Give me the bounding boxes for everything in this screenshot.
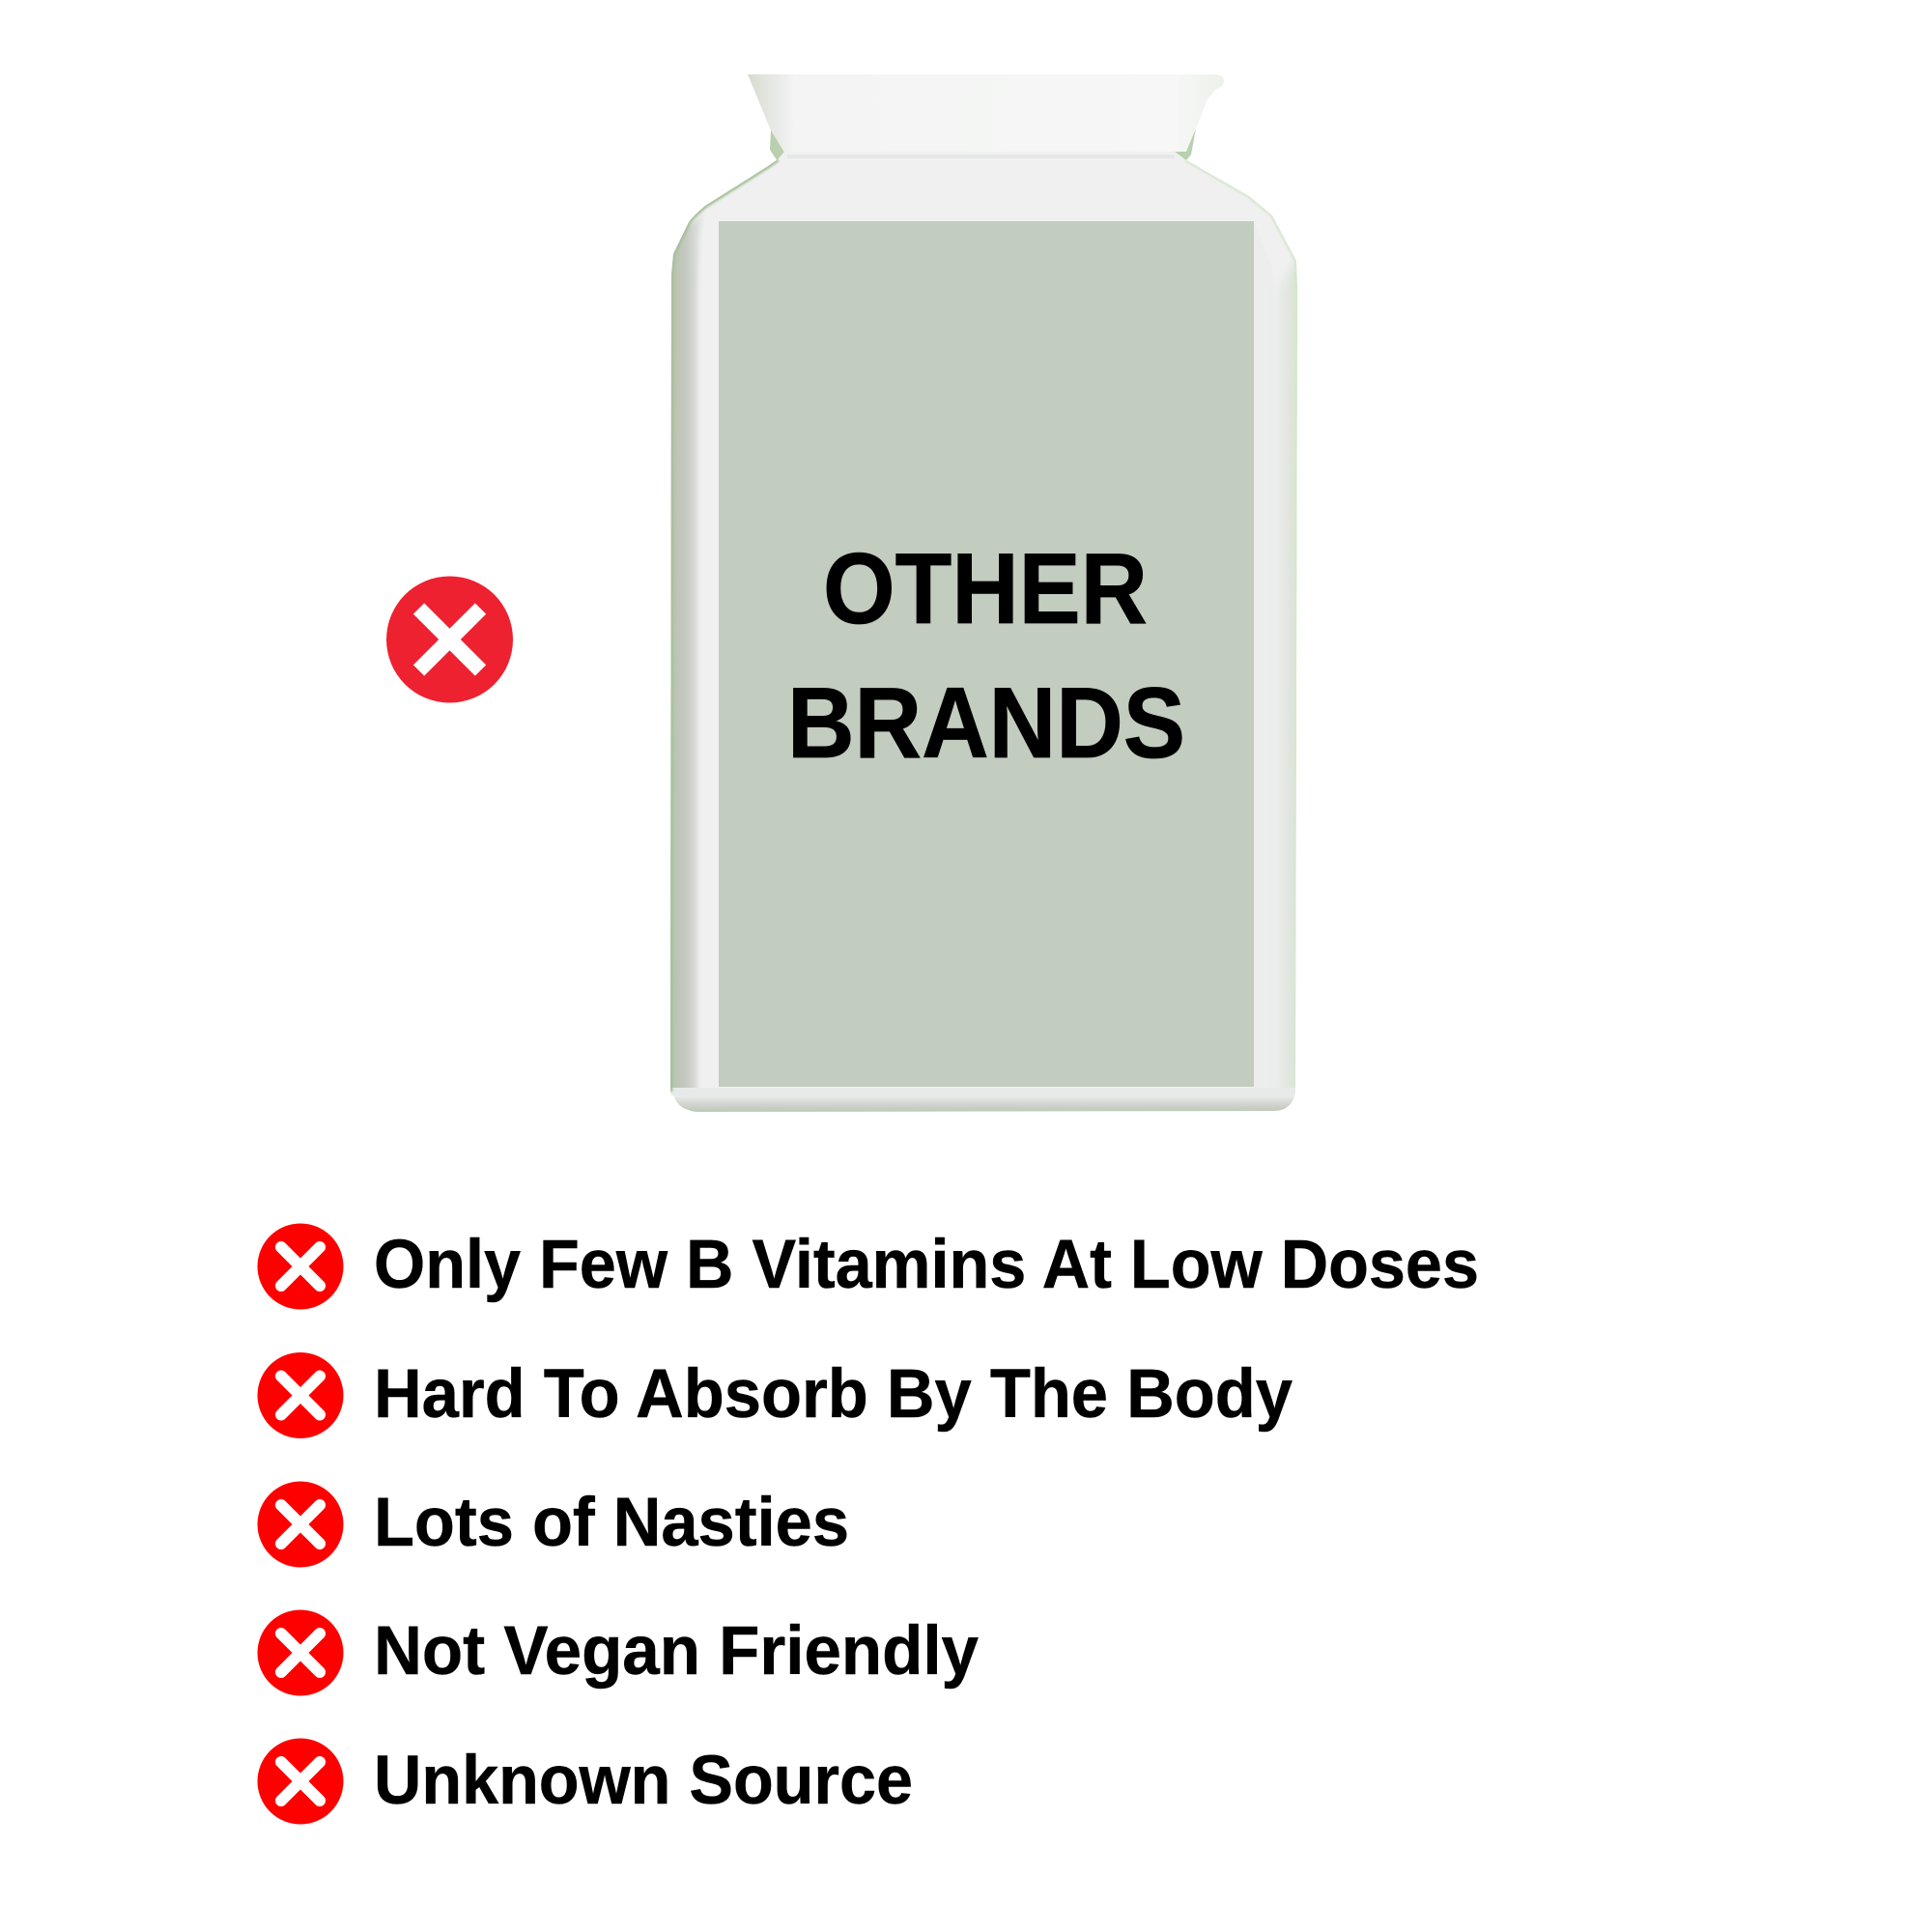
bottle lid bbox=[748, 74, 1224, 153]
bottle label bbox=[719, 221, 1254, 1087]
list item: absorption: Hard To Absorb By The Body bbox=[374, 1356, 1293, 1433]
list item: nasties bbox=[257, 1482, 849, 1567]
product bottle bbox=[662, 74, 1309, 1121]
bottle body bbox=[662, 145, 1309, 1121]
list item: source: Unknown Source bbox=[374, 1743, 913, 1819]
label text: BRANDS bbox=[787, 668, 1185, 780]
list item: nasties: Lots of Nasties bbox=[374, 1485, 849, 1561]
bottle neck shadow bbox=[770, 128, 1196, 161]
label text: OTHER bbox=[823, 533, 1148, 645]
list item: low doses: Only Few B Vitamins At Low Doses bbox=[374, 1227, 1479, 1303]
list item: vegan: Not Vegan Friendly bbox=[374, 1613, 979, 1690]
icon: large red cross badge bbox=[386, 576, 513, 703]
feature list bbox=[257, 1223, 1479, 1824]
label text bbox=[787, 533, 1185, 780]
